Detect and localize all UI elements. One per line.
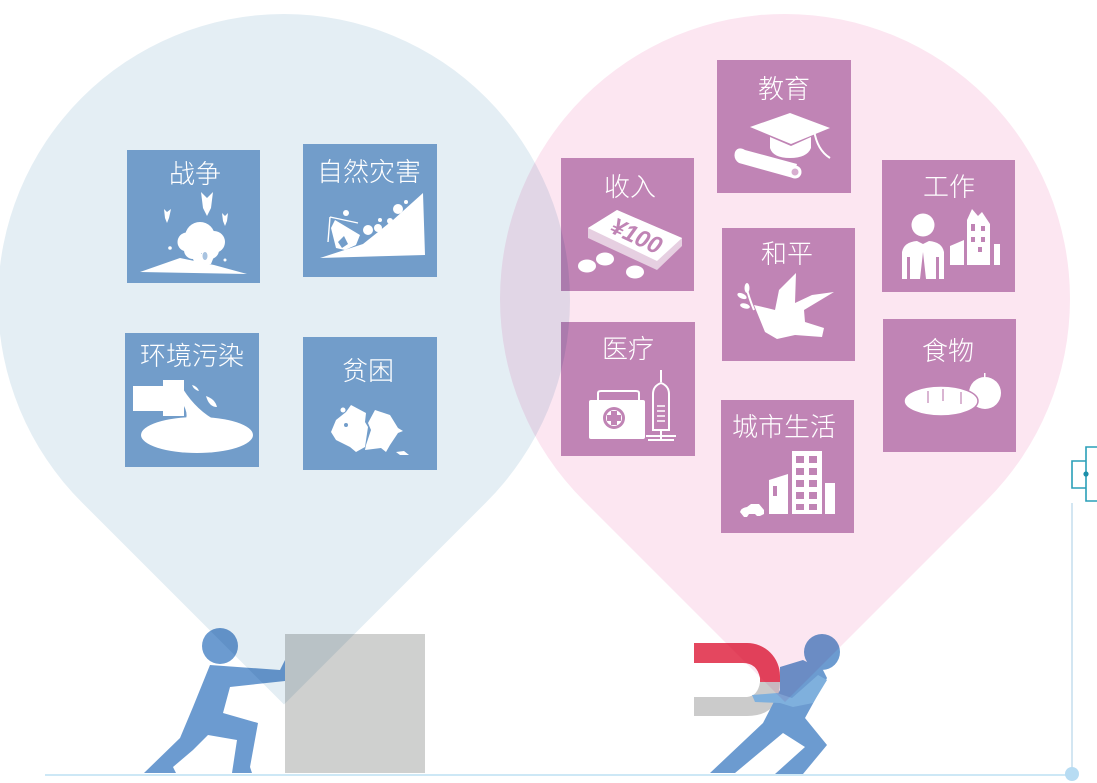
tile: education: 教育: [758, 74, 810, 104]
tile: urban life: [721, 400, 854, 533]
tile: peace: [722, 228, 855, 361]
icon: businessperson and buildings: [902, 209, 1000, 279]
icon: medical kit and syringe: [589, 370, 676, 440]
tile: food: [883, 319, 1016, 452]
icon: graduation cap: [734, 113, 830, 178]
tile: education: [717, 60, 851, 193]
pin: pull factors: [500, 14, 1070, 702]
ground line: [45, 774, 1072, 776]
figure pushing box: [144, 628, 285, 773]
icon: bread and apple: [904, 373, 1001, 416]
tile: urban life: 城市生活: [732, 412, 836, 442]
brand logo and timeline: [1065, 447, 1097, 781]
tile: pollution: [125, 333, 259, 467]
icon: landslide and house: [320, 193, 425, 258]
tile: peace: 和平: [761, 239, 813, 269]
gray box being pushed: [285, 634, 425, 773]
tile: healthcare: 医疗: [602, 334, 654, 364]
tile: natural disaster: 自然灾害: [317, 157, 421, 187]
icon: drain pipe and puddle: [133, 380, 253, 453]
icon: dove with olive branch: [736, 273, 834, 339]
tile: work: [882, 160, 1015, 292]
figure pulling magnet: [710, 634, 840, 774]
icon: banknotes and coins: ¥100: [606, 213, 667, 260]
pin: push factors: [0, 14, 570, 704]
tile: war: 战争: [169, 159, 221, 189]
tile: war: [127, 150, 260, 283]
tile: food: 食物: [922, 336, 974, 366]
magnet: [694, 643, 780, 716]
icon: explosion and missiles: [140, 192, 247, 274]
icon: broken piggy bank: [331, 405, 409, 455]
tile: income: [561, 158, 694, 291]
tile: work: 工作: [923, 172, 975, 202]
tile: income: 收入: [604, 172, 656, 202]
tile: pollution: 环境污染: [140, 341, 244, 371]
tile: poverty: [303, 337, 437, 470]
icon: buildings and car: [740, 451, 835, 517]
tile: natural disaster: [303, 144, 437, 277]
tile: healthcare: [561, 322, 695, 456]
tile: poverty: 贫困: [342, 356, 394, 386]
